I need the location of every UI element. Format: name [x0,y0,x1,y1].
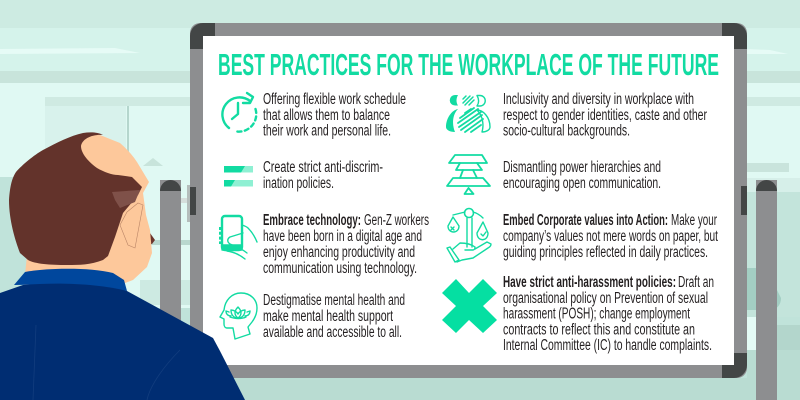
ear [120,203,143,248]
text: flexible schedule [263,91,406,140]
man seen from behind [0,132,245,400]
icon: diverse people [446,95,490,132]
icon: hand with phone [221,216,257,259]
skin of head and neck [24,134,152,285]
text: anti-harassment: Have strict anti-harassment policies: [503,274,676,291]
text: anti-discrimination [263,159,383,192]
icon: head with lotus [220,293,257,339]
text: anti-discrimination: Create strict anti-discrim- [263,159,383,176]
icon: hierarchy pyramid [447,155,490,194]
text: inclusivity: respect to gender identities, caste and other [503,107,707,124]
hair [9,132,142,265]
shirt collar [14,269,127,291]
icon: clock [222,93,256,132]
text: embrace technology: Embrace technology: [263,212,361,229]
right stand post [756,180,777,400]
text: mental health: Destigmatise mental health and [263,292,405,309]
text: embrace technology: enjoy enhancing productivity and [263,244,415,261]
text: inclusivity: socio-cultural backgrounds. [503,122,630,140]
text: embrace technology: Gen-Z workers [364,212,429,229]
text: anti-discrimination: ination policies. [263,175,334,192]
icon: green cross [442,279,497,333]
text: mental health: available and accessible to all. [263,324,402,341]
jacket [0,284,245,400]
text: dismantling hierarchies [503,159,661,192]
text: flexible schedule: their work and personal life. [263,122,391,140]
text: embrace technology: have been born in a digital age and [263,228,422,245]
text: corporate values: Embed Corporate values into Action: [503,212,668,229]
text: anti-harassment [503,274,714,354]
text: corporate values [503,212,718,261]
text: flexible schedule: that allows them to balance [263,107,390,124]
text: dismantling hierarchies: Dismantling power hierarchies and [503,159,661,176]
left stand post [160,180,190,360]
icon: policy bars [224,166,253,186]
text: dismantling hierarchies: encouraging open communication. [503,175,661,192]
icon: scales on hand [447,208,491,262]
hair highlights [112,190,140,208]
text: inclusivity [503,91,707,140]
moustache [148,233,155,244]
whiteboard [190,23,747,378]
text: mental health [263,292,405,341]
text: anti-harassment: harassment (POSH); change employment [503,306,690,322]
text: anti-harassment: Draft an [678,274,714,291]
text: corporate values: Make your [671,212,717,229]
text: anti-harassment: contracts to reflect this and constitute an [503,322,695,338]
text: flexible schedule: Offering flexible work schedule [263,91,406,108]
text: embrace technology [263,212,429,277]
text: mental health: make mental health support [263,308,393,325]
text: embrace technology: communication using technology. [263,260,417,277]
text: inclusivity: Inclusivity and diversity in workplace with [503,91,694,108]
